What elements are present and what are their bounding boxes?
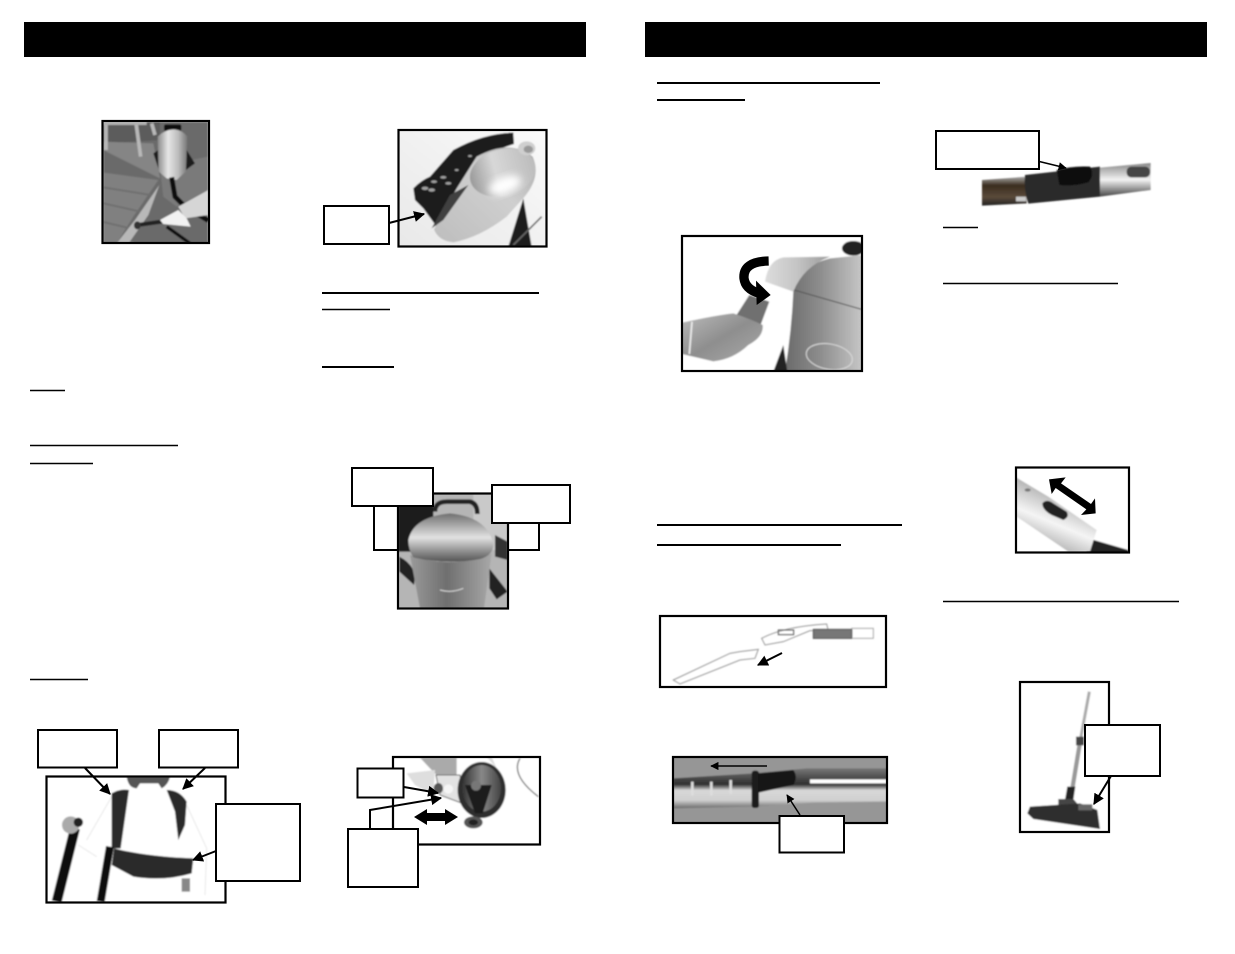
arrow xyxy=(389,214,424,223)
arrow to collar xyxy=(787,795,800,815)
underlined heading rules: right page column 1 xyxy=(657,83,902,545)
arrow belt xyxy=(193,851,216,860)
callout box 2 xyxy=(159,730,238,768)
frame xyxy=(398,130,546,246)
photo: power nozzle upright, with callout xyxy=(1019,681,1160,832)
callout box xyxy=(324,206,389,244)
callout box left xyxy=(352,468,433,506)
frame xyxy=(682,236,862,371)
arrow xyxy=(1029,159,1066,168)
photo: person wearing harness, with callouts xyxy=(38,730,300,903)
frame xyxy=(102,121,209,243)
underlined heading rules: right page column 2 xyxy=(943,228,1179,602)
callout box large xyxy=(348,829,418,887)
callout box xyxy=(1085,725,1160,776)
callout box right xyxy=(492,485,570,523)
photo: hand twisting hose into vacuum xyxy=(681,235,865,373)
underlined heading rules: left page column 1 xyxy=(30,390,178,680)
double arrow xyxy=(414,809,458,825)
photo: vacuum with harness, with callout xyxy=(324,130,547,247)
frame xyxy=(393,757,540,844)
arrow xyxy=(758,653,782,665)
photo: telescopic wand with slide collar xyxy=(673,756,888,852)
diagram: hose and wand line drawing xyxy=(660,616,886,687)
frame xyxy=(660,616,886,687)
arrow xyxy=(1094,776,1111,804)
arrow xyxy=(711,765,767,767)
photo: open dust compartment, with callouts xyxy=(348,756,541,887)
photo: sliding switch with double arrow xyxy=(1015,467,1129,553)
frame xyxy=(46,776,226,902)
underlined heading rules: left page column 2 xyxy=(322,293,539,367)
photo: wand handle with button, with callout xyxy=(936,131,1151,206)
photo: vacuum front with lid, and callouts xyxy=(352,468,570,608)
leader arrow to panel xyxy=(370,798,441,828)
frame xyxy=(1020,682,1109,832)
callout box xyxy=(936,131,1039,169)
callout box 1 xyxy=(38,730,117,768)
callout box small xyxy=(358,768,404,798)
frame xyxy=(1016,468,1129,552)
arrow right strap xyxy=(183,768,205,789)
callout box xyxy=(780,816,844,852)
frame xyxy=(398,494,508,608)
frame xyxy=(673,757,887,823)
page header bar: right xyxy=(645,22,1207,57)
leader line xyxy=(392,798,394,828)
page header bar: left xyxy=(24,22,586,57)
callout box 3 xyxy=(216,804,300,881)
left leader line xyxy=(374,506,398,550)
photo: vacuum on floor with carpet edge xyxy=(102,121,209,243)
leader arrow to latch xyxy=(404,787,438,793)
arrow left strap xyxy=(85,768,110,794)
right leader line xyxy=(508,524,539,550)
